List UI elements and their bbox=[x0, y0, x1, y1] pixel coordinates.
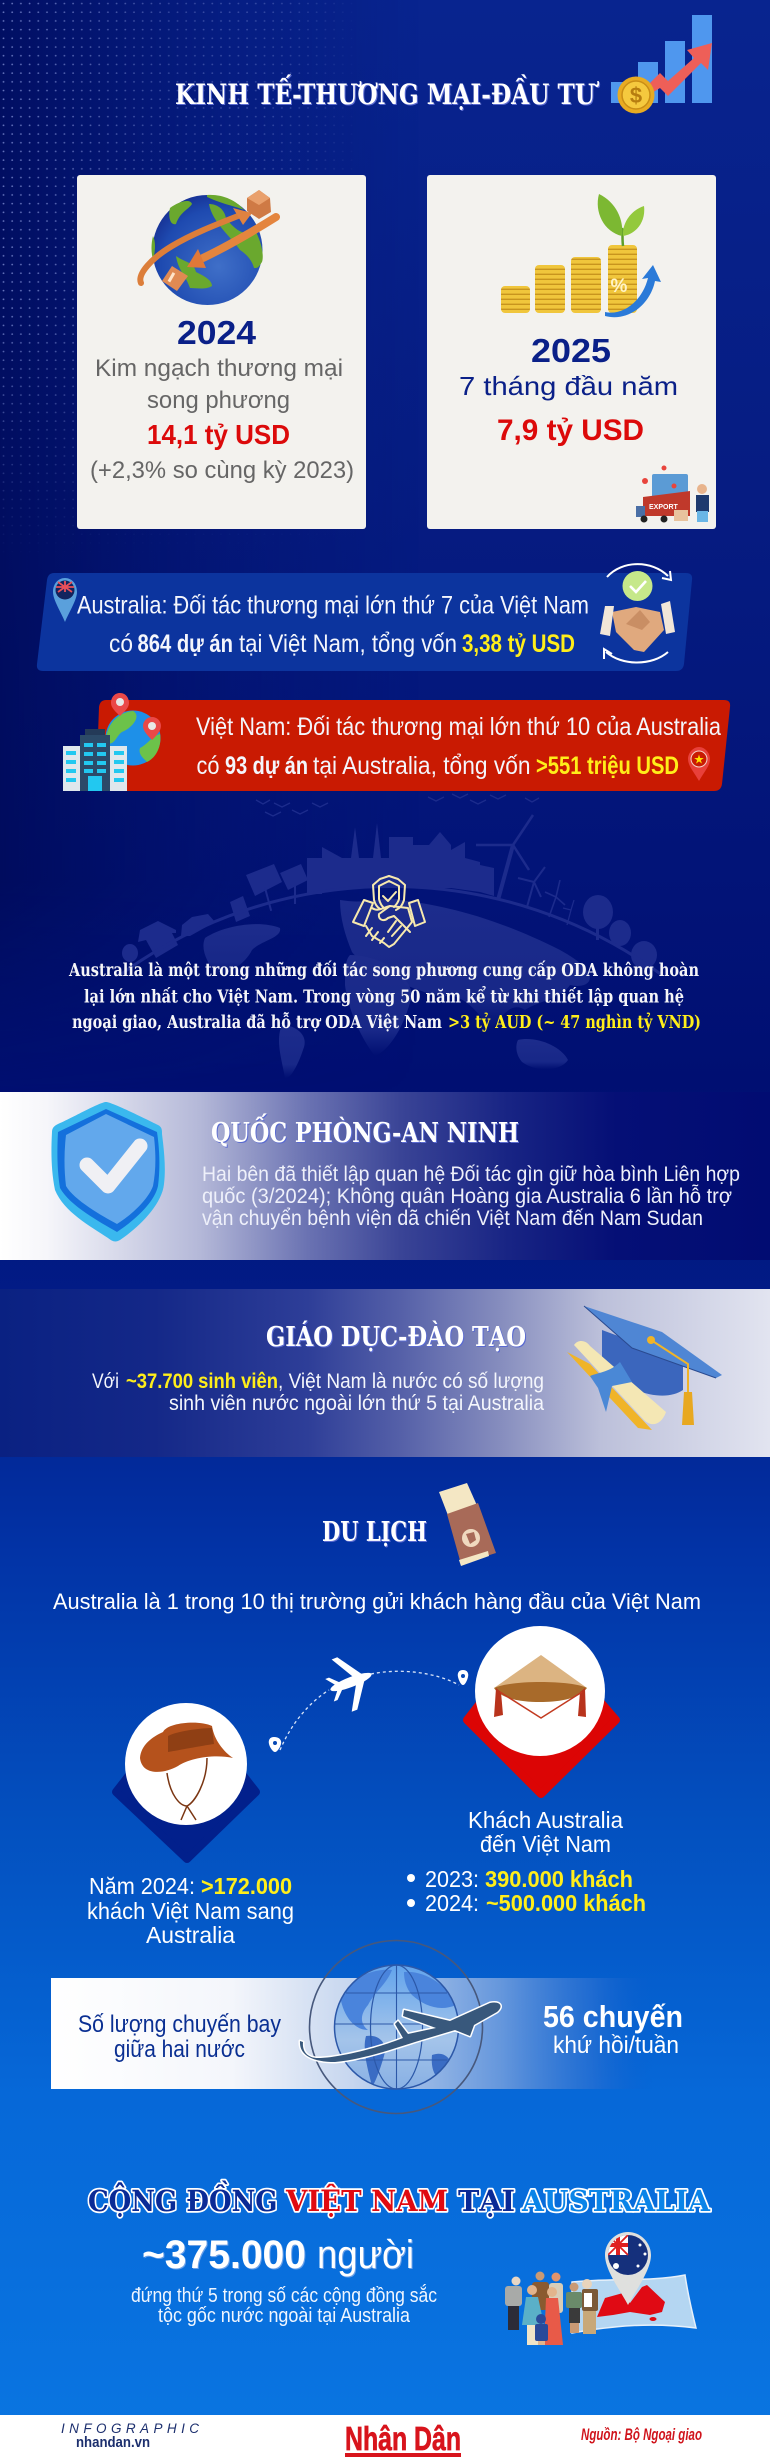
icon: Australia pin bbox=[53, 578, 77, 622]
text: flights label: Số lượng chuyến bay bbox=[78, 2011, 281, 2038]
footer bbox=[0, 2415, 770, 2464]
heading: Vietnamese community in Australia: AUSTRALIA bbox=[521, 2184, 710, 2218]
text: defence paragraph bbox=[202, 1163, 740, 1230]
text: education paragraph: Với bbox=[92, 1370, 119, 1393]
panel: defence and security bbox=[0, 1092, 770, 1260]
icon: export truck bbox=[636, 466, 709, 522]
icon: people, map and Australia pin bbox=[505, 2232, 696, 2345]
heading: Vietnamese community in Australia: VIỆT NAM bbox=[285, 2183, 448, 2218]
text: community rank: tộc gốc nước ngoài tại Australia bbox=[158, 2305, 411, 2327]
text: defence paragraph: Hai bên đã thiết lập quan hệ Đối tác gìn giữ hòa bình Liên hợp bbox=[202, 1163, 740, 1186]
text: education paragraph: ~37.700 sinh viên bbox=[126, 1370, 278, 1393]
text: community size: ~375.000 bbox=[142, 2233, 306, 2277]
icon: passport and ticket bbox=[439, 1483, 496, 1566]
panel: Australia trade partner banner bbox=[37, 564, 692, 671]
text: Australia projects line: 864 dự án bbox=[138, 630, 233, 658]
heading: education: GIÁO DỤC-ĐÀO TẠO bbox=[266, 1320, 526, 1353]
panel: 2025 trade card bbox=[427, 175, 716, 529]
panel: education bbox=[0, 1289, 770, 1457]
text: community rank bbox=[131, 2284, 437, 2327]
icon: Vietnam pin: ★ bbox=[694, 755, 704, 766]
text: first seven months: 7 tháng đầu năm bbox=[459, 371, 678, 401]
text: flights label bbox=[78, 2011, 281, 2063]
text: education paragraph: sinh viên nước ngoài lớn thứ 5 tại Australia bbox=[169, 1392, 544, 1415]
text: value 7,9 billion: 7,9 tỷ USD bbox=[497, 414, 644, 447]
text: defence paragraph: quốc (3/2024); Không quân Hoàng gia Australia 6 lần hỗ trợ bbox=[202, 1185, 732, 1208]
panel: 2024 trade card bbox=[77, 175, 366, 529]
heading: Vietnamese community in Australia bbox=[88, 2179, 710, 2218]
icon: export truck: EXPORT bbox=[649, 504, 679, 511]
text: round trips per week: khứ hồi/tuần bbox=[553, 2032, 679, 2059]
icon: globe with airliner bbox=[300, 1940, 501, 2114]
icon: graduation cap and diploma bbox=[567, 1306, 722, 1430]
icon: Australia pin with bush hat bbox=[116, 1703, 256, 1859]
text: infographic label: INFOGRAPHIC bbox=[61, 2421, 199, 2436]
text: Vietnamese visitors to Australia: khách Việt Nam sang bbox=[87, 1898, 294, 1924]
text: Vietnam projects line: tại Australia, tổng vốn bbox=[313, 752, 530, 780]
text: Australian visitors to Vietnam: ~500.000 khách bbox=[486, 1890, 646, 1916]
text: community rank: đứng thứ 5 trong số các cộng đồng sắc bbox=[131, 2284, 437, 2307]
heading: Vietnamese community in Australia: TẠI bbox=[458, 2184, 515, 2218]
text: ODA paragraph bbox=[68, 961, 701, 1033]
text: Australian visitors to Vietnam: đến Việt Nam bbox=[480, 1831, 611, 1857]
icon: growth chart with coin bbox=[611, 15, 712, 114]
text: 2024: 2024 bbox=[177, 314, 257, 351]
text: ODA paragraph: ngoại giao, Australia đã hỗ trợ ODA Việt Nam bbox=[72, 1013, 442, 1033]
text: trade label line 2: song phương bbox=[147, 387, 290, 414]
text: flights label: giữa hai nước bbox=[114, 2036, 245, 2063]
text: tourism intro: Australia là 1 trong 10 thị trường gửi khách hàng đầu của Việt Nam bbox=[53, 1589, 701, 1614]
text: 2025: 2025 bbox=[531, 332, 611, 369]
text: Vietnamese visitors to Australia: Năm 2024: bbox=[89, 1873, 195, 1899]
icon: flight path with plane bbox=[269, 1648, 468, 1752]
heading: Vietnamese community in Australia: CỘNG ĐỒNG bbox=[88, 2179, 278, 2218]
section heading: economy: KINH TẾ-THƯƠNG MẠI-ĐẦU TƯ bbox=[175, 74, 600, 111]
text: Vietnamese visitors to Australia: >172.000 bbox=[201, 1873, 292, 1899]
icon: Vietnam pin bbox=[688, 747, 710, 781]
text: Australian visitors to Vietnam bbox=[407, 1807, 646, 1916]
text: Vietnamese visitors to Australia bbox=[87, 1873, 294, 1948]
text: Australian visitors to Vietnam: 390.000 khách bbox=[485, 1866, 633, 1892]
icon: outlined handshake and shield bbox=[353, 876, 425, 947]
text: Australia projects line: có bbox=[109, 630, 133, 658]
icon: growth chart with coin: $ bbox=[630, 83, 642, 108]
text: community size bbox=[142, 2233, 414, 2277]
text: Australia projects line: 3,38 tỷ USD bbox=[462, 630, 575, 658]
text: Australia projects line bbox=[109, 630, 575, 658]
text: 56 flights: 56 chuyến bbox=[543, 1999, 683, 2034]
text: defence paragraph: vận chuyển bệnh viện dã chiến Việt Nam đến Nam Sudan bbox=[202, 1207, 703, 1230]
section heading: tourism: DU LỊCH bbox=[322, 1517, 427, 1548]
text: Australian visitors to Vietnam: 2024: bbox=[425, 1890, 479, 1916]
icon: globe, building and pins bbox=[63, 693, 161, 791]
icon: globe with trade arrows bbox=[140, 190, 276, 305]
heading: defence: QUỐC PHÒNG-AN NINH bbox=[211, 1112, 519, 1149]
text: community size: người bbox=[317, 2233, 414, 2277]
text: Vietnam projects line: 93 dự án bbox=[225, 752, 308, 780]
text: growth: (+2,3% so cùng kỳ 2023) bbox=[90, 457, 354, 484]
text: education paragraph bbox=[92, 1370, 544, 1415]
icon: shield with check bbox=[51, 1102, 165, 1241]
text: trade label line 1: Kim ngạch thương mại bbox=[95, 355, 343, 382]
text: Australia projects line: tại Việt Nam, tổng vốn bbox=[239, 630, 457, 658]
text: Vietnam projects line bbox=[196, 752, 679, 780]
icon: coin stacks with plant bbox=[501, 194, 661, 317]
panel: flights between two countries bbox=[51, 1940, 683, 2114]
text: Australian visitors to Vietnam: Khách Australia bbox=[468, 1807, 623, 1833]
text: Australia partner line: Australia: Đối tác thương mại lớn thứ 7 của Việt Nam bbox=[77, 592, 589, 620]
logo: Nhan Dan: Nhân Dân bbox=[345, 2420, 461, 2457]
text: value 14,1 billion: 14,1 tỷ USD bbox=[147, 419, 290, 450]
text: education paragraph: , Việt Nam là nước có số lượng bbox=[278, 1370, 544, 1393]
text: source: Nguồn: Bộ Ngoại giao bbox=[581, 2425, 702, 2444]
icon: Vietnam pin with conical hat bbox=[467, 1626, 616, 1794]
text: Vietnamese visitors to Australia: Australia bbox=[146, 1922, 235, 1948]
text: Australian visitors to Vietnam: 2023: bbox=[425, 1866, 479, 1892]
icon: handshake with arrows bbox=[600, 564, 675, 662]
text: Vietnam projects line: có bbox=[196, 752, 220, 780]
panel: Vietnam trade partner banner bbox=[63, 693, 730, 791]
text: ODA paragraph: >3 tỷ AUD (~ 47 nghìn tỷ VND) bbox=[448, 1013, 701, 1033]
icon: coin stacks with plant: % bbox=[611, 276, 628, 297]
text: website: nhandan.vn bbox=[76, 2434, 150, 2451]
illustration: faint city and world silhouette bbox=[120, 794, 662, 1078]
text: Vietnam projects line: >551 triệu USD bbox=[536, 752, 679, 780]
